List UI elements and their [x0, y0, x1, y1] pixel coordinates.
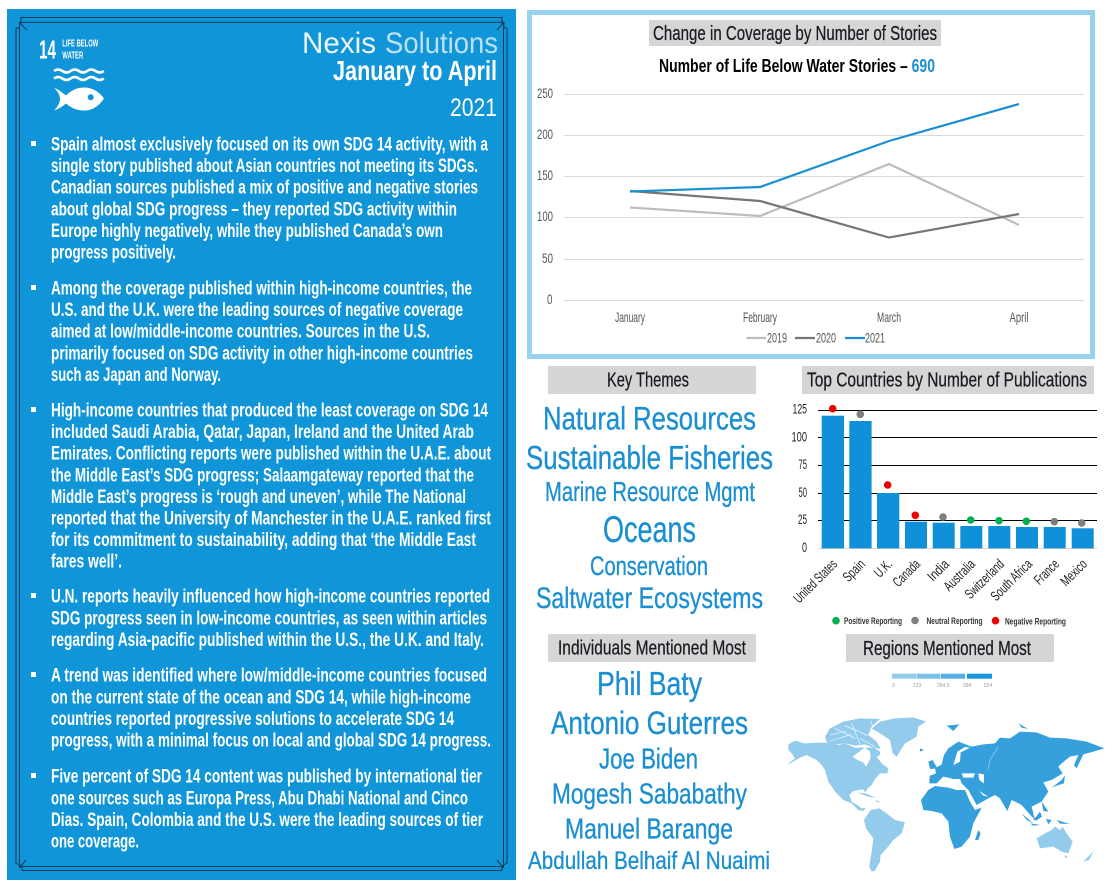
bar chart: top countries: France	[1030, 556, 1062, 588]
legend: reporting sentiment: Neutral Reporting	[926, 616, 982, 626]
text block: Spain and Canada: about global SDG progress – they reported SDG activity within	[51, 200, 457, 220]
word list: individuals: Antonio Guterres	[551, 705, 748, 741]
word list: key themes	[526, 400, 773, 615]
map region: Americas	[787, 717, 926, 872]
text block: least coverage	[31, 400, 491, 572]
text block: U.N. reports: U.N. reports heavily influenced how high-income countries reported	[51, 586, 490, 608]
heading: change in coverage: Change in Coverage by Number of Stories	[653, 23, 937, 45]
text block: trend	[31, 666, 491, 752]
bar chart: top countries: 75	[798, 456, 807, 472]
word list: individuals	[528, 665, 770, 875]
bar chart: top countries: 100	[792, 428, 807, 444]
word list: individuals: Abdullah Belhaif Al Nuaimi	[528, 847, 770, 875]
legend: map scale: 3	[892, 683, 895, 689]
title: Solutions	[385, 27, 498, 60]
heading: individuals mentioned	[548, 634, 756, 662]
legend: line chart	[746, 330, 885, 346]
map: regions mentioned	[787, 717, 1104, 872]
heading: regions mentioned: Regions Mentioned Most	[863, 638, 1031, 660]
line chart: March	[877, 309, 901, 325]
text block: U.N. reports: regarding Asia-pacific published within the U.S., the U.K. and Italy.	[51, 630, 484, 651]
heading: regions mentioned	[846, 634, 1054, 662]
text block: tier one sources: one sources such as Europa Press, Abu Dhabi National and Cinco	[51, 788, 468, 810]
bar chart: top countries: 125	[792, 400, 807, 416]
text block: U.N. reports: SDG progress seen in low-income countries, as seen within articles	[51, 608, 487, 630]
map region: Europe, Asia and Africa	[920, 723, 1104, 849]
text block: least coverage: High-income countries that produced the least coverage on SDG 14	[51, 400, 488, 422]
word list: key themes: Conservation	[590, 551, 708, 581]
text block: negative coverage: aimed at low/middle-income countries. Sources in the U.S.	[51, 322, 430, 342]
bar chart: top countries: 25	[798, 511, 807, 527]
text block: negative coverage: such as Japan and Norway.	[51, 365, 221, 386]
bar chart: top countries: Switzerland	[961, 556, 1007, 602]
bar chart: top countries: Canada	[889, 556, 923, 590]
line chart: 200	[537, 126, 553, 142]
legend: reporting sentiment: Positive Reporting	[844, 616, 902, 626]
word list: key themes: Natural Resources	[543, 400, 756, 436]
bar chart: top countries: India	[924, 556, 952, 584]
text block: Spain and Canada: Europe highly negatively, while they published Canada’s own	[51, 221, 443, 242]
text block: least coverage: Emirates. Conflicting reports were published within the U.A.E. about	[51, 444, 491, 464]
text block: negative coverage	[31, 278, 473, 386]
text block: tier one sources: Dias. Spain, Colombia and the U.S. were the leading sources of tier	[51, 810, 483, 831]
text block: least coverage: the Middle East’s SDG progress; Salaamgateway reported that the	[51, 466, 474, 486]
map region: Oceania	[1037, 827, 1094, 862]
bar chart: top countries: United States	[790, 556, 840, 606]
legend: reporting sentiment: Negative Reporting	[1005, 616, 1066, 626]
icon: SDG 14 life below water	[39, 34, 104, 110]
legend: map scale: 264.5	[937, 683, 950, 689]
icon: SDG 14 life below water: LIFE BELOW	[62, 39, 99, 50]
bar chart: top countries	[790, 400, 1097, 626]
subheading: number of stories: Number of Life Below Water Stories – 690	[659, 56, 935, 76]
line chart: April	[1010, 309, 1028, 325]
line chart: 50	[542, 250, 553, 266]
bar chart: top countries: 50	[798, 484, 807, 500]
legend: map scale: 524	[984, 683, 993, 689]
text block: U.N. reports	[31, 586, 490, 651]
text block: least coverage: Middle East’s progress is ‘rough and uneven’, while The National	[51, 487, 466, 508]
line chart: 250	[537, 85, 553, 101]
text block: tier one sources	[31, 766, 483, 852]
line chart: 0	[547, 291, 553, 307]
word list: individuals: Joe Biden	[599, 744, 698, 776]
text block: Spain and Canada: progress positively.	[51, 242, 176, 264]
text block: least coverage: fares well’.	[51, 552, 122, 572]
text block: trend: countries reported progressive solutions to accelerate SDG 14	[51, 709, 454, 730]
text block: trend: A trend was identified where low/middle-income countries focused	[51, 666, 487, 686]
word list: individuals: Manuel Barange	[565, 814, 733, 846]
word list: individuals: Mogesh Sababathy	[552, 778, 747, 810]
word list: key themes: Oceans	[603, 509, 696, 550]
panel: summary	[7, 9, 516, 880]
title	[302, 27, 498, 122]
heading: key themes	[548, 366, 756, 394]
line chart: 150	[537, 167, 553, 183]
bar chart: top countries: Mexico	[1057, 556, 1090, 589]
legend: map scale: 394	[963, 683, 972, 689]
legend: reporting sentiment	[832, 616, 1066, 626]
bar chart: top countries: Australia	[940, 556, 978, 594]
title: 2021	[450, 94, 497, 122]
text block: negative coverage: Among the coverage published within high-income countries, the	[51, 278, 472, 300]
text block: negative coverage: U.S. and the U.K. were the leading sources of negative coverage	[51, 300, 463, 321]
word list: key themes: Saltwater Ecosystems	[536, 582, 763, 615]
legend: map scale	[892, 674, 993, 689]
title: Nexis	[302, 27, 376, 60]
text block: Spain and Canada: Canadian sources published a mix of positive and negative stories	[51, 178, 478, 198]
legend: map scale: 133	[913, 683, 922, 689]
panel: change in coverage	[530, 12, 1092, 356]
word list: individuals: Phil Baty	[597, 665, 702, 702]
text block: Spain and Canada: Spain almost exclusively focused on its own SDG 14 activity, with a	[51, 134, 488, 156]
legend: line chart: 2021	[865, 330, 885, 346]
text block: least coverage: reported that the University of Manchester in the U.A.E. ranked first	[51, 508, 491, 530]
line chart: January	[615, 309, 645, 325]
text block: negative coverage: primarily focused on SDG activity in other high-income countries	[51, 344, 473, 364]
bar chart: top countries: South Africa	[987, 556, 1035, 604]
text block: trend: progress, with a minimal focus on local and global SDG 14 progress.	[51, 730, 491, 752]
bar chart: top countries: U.K.	[870, 556, 895, 581]
text block: least coverage: for its commitment to sustainability, adding that ‘the Middle East	[51, 530, 476, 551]
icon: SDG 14 life below water: WATER	[62, 50, 84, 61]
title: January to April	[333, 55, 497, 86]
line chart	[537, 85, 1084, 346]
line chart: 100	[537, 208, 553, 224]
word list: key themes: Sustainable Fisheries	[526, 439, 773, 476]
icon: SDG 14 life below water: 14	[39, 34, 56, 64]
word list: key themes: Marine Resource Mgmt	[545, 476, 755, 507]
text block: Spain and Canada	[31, 134, 488, 264]
heading: key themes: Key Themes	[607, 370, 689, 392]
bar chart: top countries: 0	[802, 539, 807, 555]
text block: trend: on the current state of the ocean and SDG 14, while high-income	[51, 688, 471, 708]
heading: individuals mentioned: Individuals Mentioned Most	[558, 638, 746, 660]
text block: tier one sources: one coverage.	[51, 832, 139, 852]
heading: change in coverage	[649, 20, 941, 46]
bar chart: top countries: Spain	[839, 556, 868, 585]
line chart: February	[743, 309, 777, 325]
legend: line chart: 2019	[767, 330, 787, 346]
legend: line chart: 2020	[816, 330, 836, 346]
text block: least coverage: included Saudi Arabia, Qatar, Japan, Ireland and the United Arab	[51, 422, 474, 443]
text block: Spain and Canada: single story published about Asian countries not meeting its SDGs.	[51, 156, 478, 177]
text block: tier one sources: Five percent of SDG 14 content was published by international tier	[51, 766, 482, 788]
